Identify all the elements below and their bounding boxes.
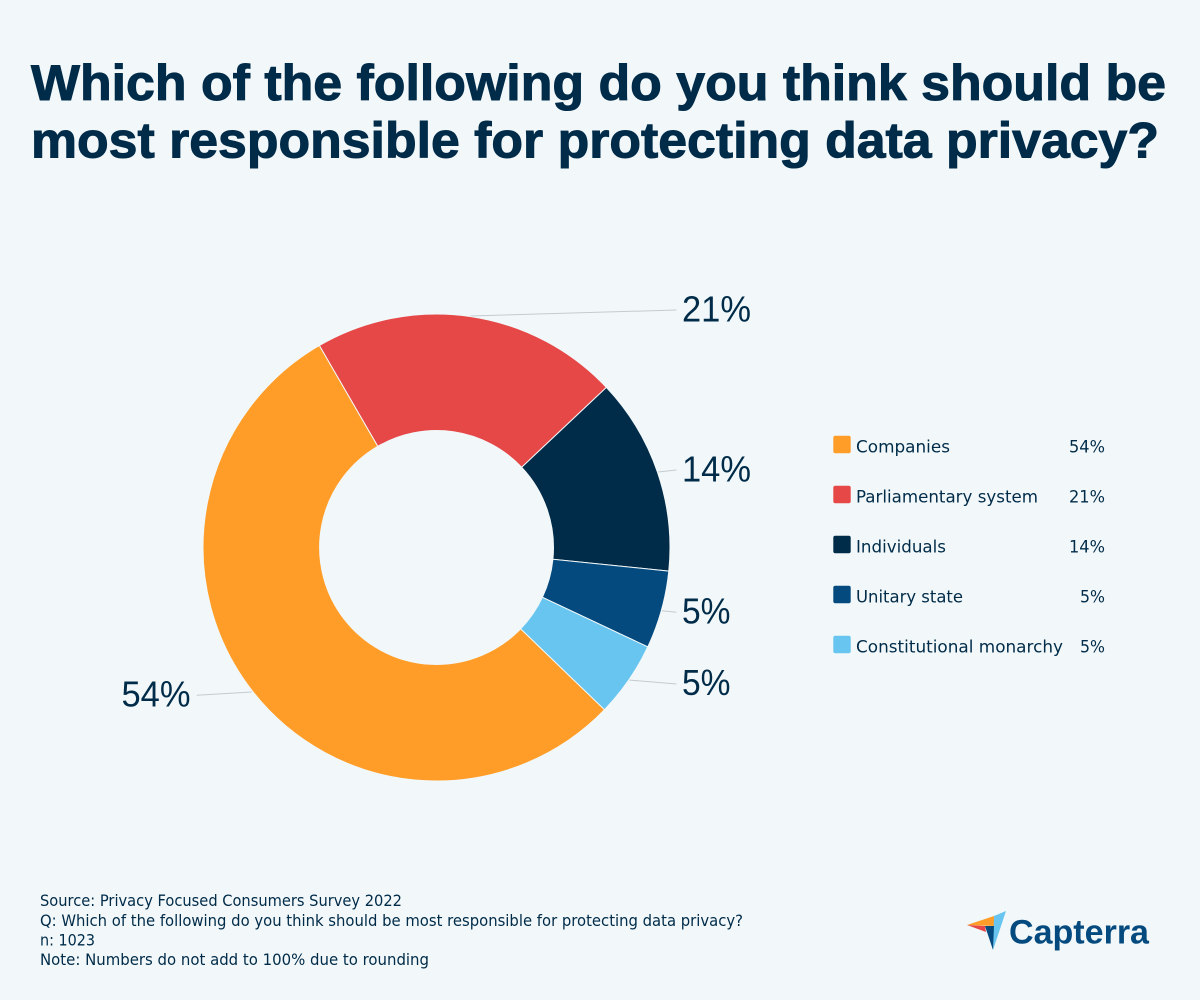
legend: Unitary state: Unitary state xyxy=(856,587,963,607)
source notes: Source: Privacy Focused Consumers Survey 2022 xyxy=(40,891,402,910)
segment: Parliamentary system 21% xyxy=(319,314,606,467)
title xyxy=(31,55,1166,168)
legend: Companies: Companies xyxy=(856,437,950,457)
legend: Individuals xyxy=(833,536,1105,557)
data labels: 21% xyxy=(682,288,751,330)
data labels: 54% xyxy=(122,674,190,715)
title: Which of the following do you think should be xyxy=(31,55,1166,111)
donut chart xyxy=(203,314,670,781)
segment: Constitutional monarchy 5% xyxy=(521,597,648,710)
data labels: 5% xyxy=(682,662,730,703)
source notes: Note: Numbers do not add to 100% due to rounding xyxy=(40,950,429,969)
segment: Individuals 14% xyxy=(522,387,670,571)
legend: Constitutional monarchy: 5% xyxy=(1080,637,1105,657)
legend: Unitary state: 5% xyxy=(1080,587,1105,607)
data labels: 14% xyxy=(682,449,751,490)
logo: Capterra: Capterra xyxy=(1009,914,1150,952)
data labels: 5% xyxy=(682,590,730,631)
legend: Parliamentary system xyxy=(833,486,1105,508)
legend: Companies xyxy=(833,436,1105,457)
legend: Individuals: 14% xyxy=(1069,537,1105,557)
legend: Parliamentary system: Parliamentary system xyxy=(856,488,1038,508)
source notes xyxy=(40,891,743,969)
legend: Companies: 54% xyxy=(1069,437,1105,457)
legend xyxy=(833,436,1105,657)
data labels xyxy=(122,288,751,715)
legend: Individuals: Individuals xyxy=(856,537,946,557)
icon: Capterra arrow xyxy=(967,911,1006,950)
legend: Unitary state xyxy=(833,586,1105,607)
segment: Companies 54% xyxy=(203,346,604,781)
source notes: n: 1023 xyxy=(40,930,95,950)
leader lines xyxy=(197,310,676,695)
source notes: Q: Which of the following do you think should be most responsible for protecting data privacy? xyxy=(40,911,743,930)
segment: Unitary state 5% xyxy=(542,559,669,647)
legend: Constitutional monarchy: Constitutional monarchy xyxy=(856,637,1063,657)
legend: Parliamentary system: 21% xyxy=(1069,488,1105,508)
title: most responsible for protecting data privacy? xyxy=(31,112,1159,168)
